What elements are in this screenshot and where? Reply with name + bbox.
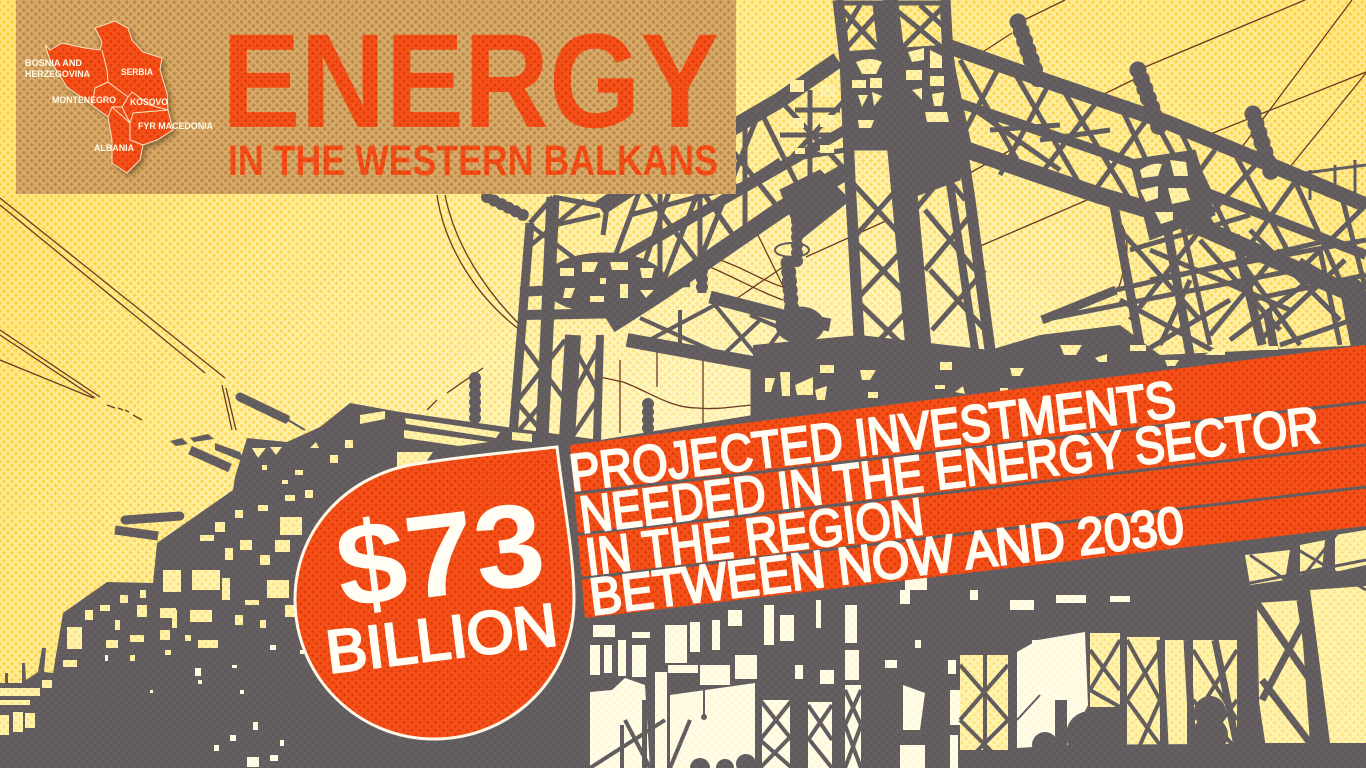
map labels <box>25 58 213 153</box>
map labels: MONTENEGRO <box>52 95 116 105</box>
openings in the tower head and hubs <box>560 48 1190 302</box>
left tower legs <box>513 223 530 435</box>
lattice over lower openings <box>590 530 1366 768</box>
panel: title header <box>16 0 736 194</box>
badge unit: BILLION <box>322 591 561 686</box>
banner text <box>566 371 1323 627</box>
title: ENERGY <box>222 7 719 156</box>
banner text: IN THE REGION <box>582 488 927 587</box>
region map <box>25 21 213 176</box>
machinery at the base <box>620 696 1366 768</box>
map labels: BOSNIA AND <box>25 58 82 68</box>
map labels: KOSOVO <box>130 97 168 107</box>
main arm chords <box>950 47 1366 205</box>
steel pylon: solid lower silhouette <box>0 325 1366 768</box>
lattice <box>610 3 985 360</box>
badge amount: $73 <box>329 477 552 634</box>
central tower legs <box>885 0 925 420</box>
map labels: SERBIA <box>121 67 153 77</box>
banner strips <box>570 345 1366 618</box>
map labels: HERZEGOVINA <box>25 69 90 79</box>
callout badge: $73 billion <box>295 447 574 739</box>
callout banner: projected investments <box>566 345 1366 627</box>
map labels: ALBANIA <box>94 143 134 153</box>
hub nodes and insulators <box>115 20 1364 536</box>
steel pylon: upper lattice <box>513 0 1366 440</box>
map labels: FYR MACEDONIA <box>138 121 213 131</box>
subtitle: IN THE WESTERN BALKANS <box>228 137 718 185</box>
banner text: PROJECTED INVESTMENTS <box>566 371 1179 503</box>
banner text: BETWEEN NOW AND 2030 <box>586 496 1187 627</box>
openings above the banner <box>765 345 1278 400</box>
badge drop shape <box>295 447 574 739</box>
small openings in the silhouette <box>105 645 304 767</box>
lower-left truss openings <box>0 411 532 735</box>
lower-right openings <box>960 530 1366 750</box>
central band openings <box>590 570 1130 768</box>
